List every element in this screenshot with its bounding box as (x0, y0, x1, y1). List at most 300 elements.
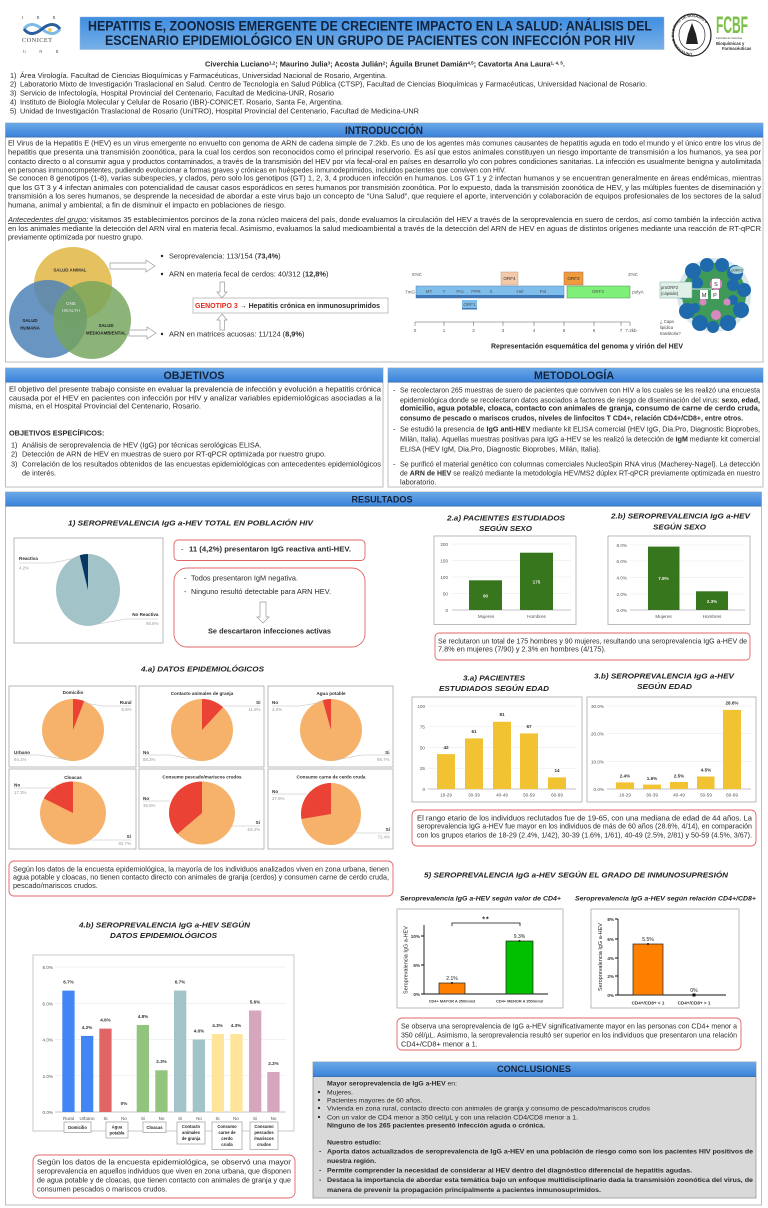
title banner: HEPATITIS E, ZOONOSIS EMERGENTE DE CRECIENTE IMPACTO EN LA SALUD: ANÁLISIS DEL (88, 18, 652, 34)
diagram: HEV genome: ORF4 (503, 276, 516, 281)
text: introducción: humana, animal y ambiental, a fin de disminuir el impacto en poblaciones de riesgo. (8, 200, 286, 210)
logo: IBR CONICET UNR: UNR (23, 49, 72, 54)
venn diagram: one health: SALUD (98, 323, 114, 328)
pie chart: carne de cerdo: 27.6% (272, 796, 285, 801)
text: introducción: que los GT 3 y 4 infectan animales con potencialidad de causar casos esporádicos en seres humanos por transmisión zoonótica. Por lo expuesto, dada la transmisión zoonótica de HEV, y las múltiples fuentes de diseminación y (8, 183, 761, 192)
bar chart: seroprevalencia según datos epidemiológicos: Si (141, 1116, 145, 1121)
bar chart: pacientes según edad: 81 (499, 712, 505, 717)
diagram: HEV genome: 7.2kb (625, 328, 637, 333)
diagram: HEV genome: 5 (563, 328, 566, 333)
text: nuestro estudio: - (319, 1177, 321, 1184)
bar chart: relación CD4+/CD8+: 8% (607, 917, 614, 922)
heading: 2b seroprevalencia según sexo: SEGÚN SEXO (653, 522, 706, 532)
text: mayor seroprevalencia: Pacientes mayores de 60 años. (327, 1097, 422, 1104)
bar chart: seroprevalencia según datos epidemiológicos: 2.0% (43, 1074, 53, 1079)
callout: datos epidemiológicos: pescado/mariscos crudos. (13, 881, 98, 890)
callout: IgG reactiva (174, 540, 365, 560)
pie chart: agua potable: Si (385, 750, 390, 755)
diagram: HEV genome: Pro (456, 289, 464, 294)
bar chart: seroprevalencia según datos epidemiológicos: 5.6% (250, 1000, 260, 1004)
pie chart: carne de cerdo: Consumo carne de cerdo cruda (297, 774, 366, 780)
bar chart: seroprevalencia según sexo: 4.0% (617, 576, 627, 580)
diagram: HEV virion: S (714, 282, 718, 288)
bar chart: seroprevalencia según edad: 50-59 (700, 792, 712, 798)
diagram: HEV genome: ORF2 (592, 289, 605, 294)
affiliations: Laboratorio Mixto de Investigación Traslacional en Salud. Centro de Tecnología en Salud Pública (CTSP), Facultad de Ciencias Bioquímicas y Farmacéuticas, Universidad Nacional de Rosario. (20, 80, 647, 89)
pie chart: domicilio: Urbano (14, 750, 30, 755)
heading: 2a pacientes según sexo (446, 514, 565, 533)
callout: sexo (435, 633, 750, 660)
callout: sexo: 7.8% en mujeres (7/90) y 2.3% en hombres (4/175). (438, 644, 606, 654)
text: nuestro estudio: nuestra región. (327, 1158, 376, 1165)
caption: genome and virion: Representación esquemática del genoma y virión del HEV (491, 342, 683, 350)
bar chart: seroprevalencia según sexo: 8.0% (617, 543, 627, 548)
heading: metodología (388, 368, 763, 382)
bar chart: seroprevalencia según datos epidemiológicos: Consumo (217, 1124, 237, 1129)
results list: animal and environmental: Seroprevalencia: 113/154 (73,4%) (169, 252, 281, 260)
text: mayor seroprevalencia: Mujeres. (327, 1089, 353, 1096)
authors: 3 (328, 60, 331, 66)
diagram: HEV genome: ORF3 (567, 276, 580, 281)
callout: infecciones activas (174, 568, 365, 647)
bar chart: seroprevalencia según datos epidemiológicos: Si (215, 1116, 220, 1121)
bar chart: pacientes según edad: 50-59 (523, 792, 535, 798)
diagram: HEV genome: Y (442, 289, 446, 294)
venn diagram: one health: SALUD ANIMAL (53, 268, 87, 272)
bar chart: pacientes según sexo: 150 (440, 558, 448, 564)
bar chart: seroprevalencia según datos epidemiológicos: pescados (254, 1130, 274, 1135)
bar chart: relación CD4+/CD8+: 6% (607, 937, 614, 942)
text: material genético: de ARN de HEV se realizó mediante la metodología HEV/MS2 dúplex RT-qPCR previamente optimizada en nuestro (400, 468, 760, 478)
bar chart: seroprevalencia según datos epidemiológicos: /mariscos (254, 1136, 274, 1141)
text: objetivos específicos (9, 428, 381, 478)
panel: metodología (388, 368, 763, 487)
authors (205, 60, 565, 68)
authors: 2 (383, 60, 386, 66)
heading: 3a pacientes según edad (439, 674, 550, 693)
callout: infecciones activas: Ninguno resultó detectable para ARN HEV. (191, 587, 331, 596)
arrow: up to genotype (217, 314, 227, 330)
text: introducción: en los animales mediante la detección del ARN viral en materia fecal. Asimismo, evaluamos la salud medioambiental a través de la detección del ARN de HEV en aguas de distintos orígenes mediante una reacción de RT-qPCR (8, 224, 761, 233)
title banner (80, 17, 664, 50)
diagram: HEV virion: P (713, 293, 717, 299)
heading: 3a pacientes según edad: ESTUDIADOS SEGÚN EDAD (439, 684, 550, 693)
bar chart: seroprevalencia según edad: 28.6% (725, 700, 739, 706)
bar chart: relación CD4+/CD8+: Seroprevalencia IgG a-HEV (598, 923, 604, 991)
bar chart: relación CD4+/CD8+: 2% (607, 974, 614, 979)
diagram: HEV virion: M (702, 293, 707, 299)
callout: inmunosupresión (397, 1018, 741, 1050)
text: mayor seroprevalencia: Con un valor de CD4 menor a 350 cel/µL y con una relación CD4/CD8 menor a 1. (327, 1114, 578, 1121)
heading: 4b seroprevalencia epidemiológica: 4.b) SEROPREVALENCIA IgG a-HEV SEGÚN (78, 920, 251, 930)
heading: 4b seroprevalencia epidemiológica (78, 920, 251, 940)
bar chart: seroprevalencia según edad: 20.0% (591, 732, 604, 736)
pie chart: contacto animales (139, 686, 264, 767)
callout: datos epidemiológicos (9, 861, 393, 896)
bar chart: pacientes según edad: 100 (417, 704, 425, 709)
pie chart: pescado: 36.6% (143, 803, 156, 808)
callout: infecciones activas: - (184, 574, 187, 582)
pie chart: domicilio: Domicilio (63, 690, 84, 695)
diagram: HEV genome: 7mG (405, 290, 415, 294)
text: serología: - (393, 424, 396, 434)
text: objetivos específicos: Análisis de seroprevalencia de HEV (IgG) por técnicas serológicas ELISA. (22, 440, 262, 450)
arrow: environment to results (129, 327, 156, 339)
pie chart: contacto animales: No (143, 750, 149, 755)
title banner: ESCENARIO EPIDEMIOLÓGICO EN UN GRUPO DE PACIENTES CON INFECCIÓN POR HIV (105, 33, 635, 48)
diagram: HEV genome: 2 (472, 328, 475, 333)
pie chart: pescado: No (143, 796, 149, 801)
bar chart: seroprevalencia según datos epidemiológicos: 6.0% (43, 1001, 53, 1006)
bar chart: seroprevalencia según sexo: Mujeres (655, 614, 672, 619)
bar chart: seroprevalencia según datos epidemiológicos: cerdo (221, 1136, 233, 1141)
logo: faculty: Bioquímicas y (716, 41, 745, 46)
bar chart: pacientes según edad (412, 697, 582, 802)
bar chart: seroprevalencia según datos epidemiológicos: 4.6% (100, 1018, 111, 1022)
text: objetivos específicos: OBJETIVOS ESPECÍFICOS: (9, 428, 104, 438)
pie chart: domicilio: Rural (120, 700, 132, 705)
bar chart: seroprevalencia según sexo: 0.0% (617, 608, 627, 613)
bar chart: seroprevalencia según datos epidemiológicos: Agua (112, 1124, 123, 1130)
diagram: HEV genome (405, 272, 645, 333)
bar chart: valor de CD4+: 9.3% (514, 934, 526, 940)
heading: 3b seroprevalencia según edad (594, 672, 735, 691)
heading: resultados (6, 492, 762, 506)
text: mayor seroprevalencia: Mayor seroprevalencia de IgG a-HEV en: (327, 1080, 457, 1087)
text: introducción: contacto directo o al consumir agua y productos contaminados, a través de la transmisión del HEV por vía fecal-oral en países en desarrollo y/o con pobres condiciones sanitarias. La infección es usualmente benigna y autolimitada (8, 157, 762, 166)
text: material genético: laboratorio. (400, 478, 437, 486)
bar chart: valor de CD4+: Seroprevalencia IgG a-HEV (404, 926, 410, 994)
text: objetivos específicos: 3) (11, 460, 18, 468)
bar chart: pacientes según edad: 0 (422, 787, 425, 792)
bar chart: pacientes según edad: 50 (420, 746, 425, 750)
diagram: HEV virion: pORF3 (732, 268, 743, 272)
pie chart: cloacas (9, 769, 136, 849)
venn diagram: one health: MEDIOAMBIENTAL (86, 330, 126, 336)
text: nuestro estudio: - (319, 1148, 321, 1155)
heading: 5 inmunosupresión: 5) SEROPREVALENCIA IgG a-HEV SEGÚN EL GRADO DE INMUNOSUPRESIÓN (424, 870, 729, 880)
text: muestras: Se recolectaron 265 muestras de suero de pacientes que conviven con HIV a los cuales se les realizó una encuesta (400, 386, 761, 394)
text: nuestro estudio (319, 1139, 753, 1194)
pie chart: pescado: Si (256, 820, 260, 825)
affiliations: 2) (10, 80, 16, 89)
text: serología (393, 424, 760, 454)
text: nuestro estudio: - (319, 1167, 321, 1174)
bar chart: pacientes según edad: 42 (443, 745, 449, 750)
heading: conclusiones (313, 1062, 756, 1077)
heading: metodología: METODOLOGÍA (534, 369, 614, 382)
callout: sexo: Se reclutaron un total de 175 hombres y 90 mujeres, resultando una seroprevalencia IgG a-HEV de (438, 636, 747, 646)
bar chart: valor de CD4+: ** (482, 916, 490, 924)
bar chart: pacientes según sexo: 90 (483, 594, 488, 598)
pie chart: agua potable: 4.3% (272, 707, 282, 712)
diagram: HEV genome: 4 (533, 328, 536, 333)
text: objetivo general (9, 384, 382, 410)
text: introducción: El Virus de la Hepatitis E (HEV) es un virus emergente no envuelto con genoma de ARN de cadena simple de 7.2kb. Es uno de los agentes más comunes causantes de hepatitis aguda en todo el mundo y el único entre los virus de (8, 138, 761, 148)
authors: ; Águila Brunet Damián (385, 60, 468, 68)
results list: animal and environmental: ARN en materia fecal de cerdos: 40/312 (12,8%) (169, 270, 328, 278)
bar chart: seroprevalencia según datos epidemiológicos: Consumo (254, 1124, 274, 1129)
authors: ; Maurino Julia (275, 60, 328, 68)
bar chart: seroprevalencia según sexo: 6.0% (617, 559, 627, 564)
heading: conclusiones: CONCLUSIONES (497, 1064, 571, 1074)
bar chart: seroprevalencia según datos epidemiológicos: 4.3% (231, 1023, 241, 1028)
authors: Civerchia Luciano (205, 60, 270, 68)
logo: faculty: Facultad de Ciencias (716, 36, 743, 40)
logo: IBR CONICET UNR: CONICET (22, 37, 52, 44)
pie chart: agua potable (268, 686, 393, 767)
bar chart: valor de CD4+: 2.1% (446, 976, 458, 982)
pie chart: pescado (139, 769, 264, 849)
logo: IBR CONICET UNR (22, 15, 72, 54)
text: nuestro estudio: Destaca la importancia de abordar esta temática bajo un enfoque multidisciplinario dada la transmisión zoonótica del virus, de (327, 1177, 753, 1184)
affiliations: Servicio de Infectología, Hospital Provincial del Centenario, Facultad de Medicina-UNR, Rosario (20, 89, 334, 98)
pie chart: seroprevalencia total: 95.8% (146, 621, 159, 626)
bar chart: pacientes según sexo: Hombres (527, 614, 547, 619)
text: objetivos específicos: 1) (11, 440, 18, 450)
text: muestras: - (393, 386, 396, 394)
pie chart: carne de cerdo: Si (386, 827, 390, 832)
heading: 2a pacientes según sexo: SEGÚN SEXO (479, 524, 532, 533)
diagram: HEV virion: proORF2 (661, 285, 679, 290)
text: material genético (393, 460, 760, 486)
text: objetivos específicos: Correlación de los resultados obtenidos de las encuestas epidemiológicas con antecedentes epidemiológicos (22, 460, 381, 468)
text: muestras: epidemiológica donde se recolectaron datos asociados a factores de riesgo de diseminación del virus: sexo, edad, (400, 396, 760, 404)
callout: datos epidemiológicos: agua potable y cloacas, no tienen contacto directo con animales de granja (cerdos) y consumen carne de cerdo cruda, (13, 872, 389, 882)
bar chart: seroprevalencia según datos epidemiológicos: 6.7% (175, 980, 185, 984)
pie chart: agua potable: Agua potable (316, 691, 346, 696)
panel: conclusiones (313, 1062, 756, 1198)
bar chart: seroprevalencia según edad: 40-49 (673, 792, 685, 798)
text: nuestro estudio: Permite comprender la necesidad de considerar al HEV dentro del diagnóstico diferencial de hepatitis agudas. (327, 1167, 692, 1174)
bar chart: seroprevalencia según edad: 1.6% (647, 776, 657, 781)
callout: IgG reactiva: - (181, 544, 184, 554)
callout: seroprevalencia epidemiológica: de agua potable y de cloacas, que tienen contacto con animales de granja y que (37, 1176, 291, 1184)
callout: infecciones activas: Todos presentaron IgM negativa. (191, 574, 298, 582)
pie chart: cloacas: No (14, 782, 20, 788)
text: mayor seroprevalencia: Ninguno de los 265 pacientes presentó infección aguda o crónica. (327, 1122, 545, 1129)
bar chart: seroprevalencia según datos epidemiológicos: 2.3% (156, 1059, 167, 1064)
bar chart: seroprevalencia según datos epidemiológicos: Si (253, 1116, 257, 1121)
bar chart: seroprevalencia según datos epidemiológicos: crudos (257, 1142, 272, 1147)
pie chart: agua potable: No (272, 700, 278, 705)
affiliations: 3) (10, 89, 16, 98)
pie chart: pescado: 63.4% (248, 827, 260, 832)
diagram: HEV virion: (cápside) (661, 291, 679, 296)
bar chart: seroprevalencia según datos epidemiológicos: 8.0% (43, 965, 53, 970)
bar chart: pacientes según sexo: 50 (443, 592, 448, 596)
text: objetivos específicos: Detección de ARN de HEV en muestras de suero por RT-qPCR optimizada por nuestro grupo. (22, 450, 326, 458)
affiliations: Unidad de Investigación Traslacional de Rosario (UniTRO), Hospital Provincial del Centenario, Facultad de Medicina-UNR (20, 106, 419, 115)
pie chart: carne de cerdo (268, 769, 393, 849)
bar chart: seroprevalencia según datos epidemiológicos: 6.7% (63, 980, 74, 984)
callout: seroprevalencia epidemiológica: consumen pescados o mariscos crudos. (37, 1184, 167, 1194)
diagram: HEV genome: PPR (471, 289, 481, 294)
bar chart: seroprevalencia según datos epidemiológicos (33, 955, 294, 1150)
panel: resultados (6, 492, 762, 1205)
text: introducción: previamente optimizada por nuestro grupo. (8, 232, 143, 242)
text: mayor seroprevalencia: Vivienda en zona rural, contacto directo con animales de granja y consumo de pescado/mariscos crudos (327, 1105, 651, 1112)
bar chart: relación CD4+/CD8+: 5.5% (642, 937, 654, 943)
pie chart: seroprevalencia total (14, 538, 163, 643)
bar chart: pacientes según edad: 75 (420, 724, 425, 730)
text: objetivos específicos: de interés. (22, 468, 56, 478)
bar chart: valor de CD4+: CD4+ MENOR A 350/mm3 (496, 998, 544, 1004)
callout: seroprevalencia epidemiológica: Según los datos de la encuesta epidemiológica, se observó una mayor (37, 1158, 292, 1166)
diagram: HEV genome: X (489, 289, 493, 294)
bar chart: seroprevalencia según datos epidemiológicos: Contacto (182, 1124, 201, 1129)
bar chart: relación CD4+/CD8+: CD4+/CD8+ < 1 (632, 1000, 665, 1006)
bar chart: relación CD4+/CD8+: 0% (690, 988, 698, 994)
heading: 4a datos epidemiológicos: 4.a) DATOS EPIDEMIOLÓGICOS (140, 664, 264, 674)
callout: genotipo 3: GENOTIPO 3 → Hepatitis crónica en inmunosuprimidos (195, 301, 380, 310)
pie chart: carne de cerdo: No (272, 789, 278, 794)
diagram: HEV genome: 3 (502, 328, 505, 333)
panel: objetivos (6, 368, 383, 487)
bar chart: pacientes según edad: 67 (526, 724, 532, 729)
arrow: animal to results (110, 260, 155, 272)
callout: seroprevalencia epidemiológica: seroprevalencia en aquellos individuos que viven en zona urbana, que disponen (37, 1166, 291, 1176)
affiliations: Instituto de Biología Molecular y Celular de Rosario (IBR)-CONICET. Rosario, Santa Fe, Argentina. (20, 97, 343, 106)
bar chart: pacientes según edad: 30-39 (468, 792, 480, 798)
pie chart: seroprevalencia total: Reactiva (19, 556, 38, 561)
heading: seroprevalencia total: 1) SEROPREVALENCIA IgG a-HEV TOTAL EN POBLACIÓN HIV (68, 518, 314, 528)
text: muestras (393, 386, 761, 422)
bar chart: seroprevalencia según datos epidemiológicos: Si (103, 1116, 108, 1121)
callout: infecciones activas: - (184, 587, 187, 596)
venn diagram: one health: HEALTH (62, 308, 80, 313)
bar chart: seroprevalencia según datos epidemiológicos: Rural (63, 1116, 74, 1121)
bar chart: seroprevalencia según datos epidemiológicos: Domicilio (68, 1125, 87, 1130)
pie chart: contacto animales: 88.2% (143, 757, 156, 762)
heading: introducción (6, 123, 763, 138)
bar chart: pacientes según sexo: Mujeres (478, 614, 495, 619)
bar chart: seroprevalencia según datos epidemiológicos: animales (182, 1130, 201, 1135)
bar chart: seroprevalencia según edad: 0.0% (594, 787, 604, 792)
results list: animal and environmental: ARN en matrices acuosas: 11/124 (8,9%) (169, 330, 304, 338)
pie chart: cloacas: Si (127, 834, 131, 839)
bar chart: relación CD4+/CD8+: CD4+/CD8+ > 1 (678, 1000, 711, 1006)
subheading: relación CD4+/CD8+: Seroprevalencia IgG a-HEV según relación CD4+/CD8+ (575, 896, 756, 902)
pie chart: agua potable: 95.7% (377, 757, 390, 762)
text: material genético: Se purificó el material genético con columnas comerciales NucleoSpin RNA virus (Macherey-Nagel). La detección (400, 460, 760, 468)
bar chart: seroprevalencia según edad: 10.0% (591, 760, 604, 764)
bar chart: pacientes según sexo (434, 536, 576, 624)
text: objetivo general: El objetivo del presente trabajo consiste en evaluar la prevalencia de infección y evolución a hepatitis crónica (9, 384, 382, 394)
bar chart: seroprevalencia según edad: 4.5% (701, 768, 711, 772)
text: muestras: consumo de pescado o mariscos crudos, niveles de linfocitos T CD4+, relación CD4+/CD8+, entre otros. (400, 414, 743, 422)
text: nuestro estudio: manera de prevenir la propagación principalmente a pacientes inmunosuprimidos. (327, 1187, 601, 1194)
text: introducción: en personas inmunocompetentes, pudiendo evolucionar a formas graves y crónicas en huéspedes inmunodeprimidos, incluidos pacientes que conviven con HIV. (8, 166, 506, 174)
bar chart: relación CD4+/CD8+: 4% (607, 956, 614, 961)
bar chart: seroprevalencia según datos epidemiológicos: Si (178, 1116, 182, 1121)
venn diagram: one health (9, 247, 131, 359)
callout: inmunosupresión: Se observa una seroprevalencia de IgG a-HEV significativamente mayor en las personas con CD4+ menor a (401, 1022, 738, 1030)
bar chart: seroprevalencia según edad: 18-29 (619, 792, 631, 798)
authors: ; Cavatorta Ana Laura (474, 60, 551, 68)
text: muestras: domicilio, agua potable, cloaca, contacto con animales de granja, consumo de carne de cerdo cruda, (400, 404, 760, 412)
affiliations: 5) (10, 106, 16, 115)
pie chart: pescado: Consumo pescado/mariscos crudos (162, 774, 242, 780)
diagram: HEV genome: MT (426, 289, 433, 294)
bar chart: seroprevalencia según datos epidemiológicos: potable (110, 1130, 125, 1136)
logo: faculty (716, 12, 752, 51)
bar chart: seroprevalencia según datos epidemiológicos: 4.8% (138, 1014, 148, 1019)
heading: 3b seroprevalencia según edad: SEGÚN EDAD (637, 682, 693, 691)
affiliations: 4) (10, 97, 16, 106)
heading: resultados: RESULTADOS (352, 494, 412, 504)
bar chart: valor de CD4+: 0% (413, 992, 420, 997)
bar chart: seroprevalencia según datos epidemiológicos: 0.0% (43, 1110, 53, 1115)
bar chart: pacientes según sexo: 175 (533, 580, 541, 584)
text: objetivo general: misma, en el Hospital Provincial del Centenario, Rosario. (9, 402, 201, 410)
bar chart: seroprevalencia según edad: 60-69 (726, 792, 738, 798)
bar chart: seroprevalencia según datos epidemiológicos: No (233, 1116, 239, 1121)
bar chart: seroprevalencia según datos epidemiológicos: No (271, 1116, 277, 1121)
bar chart: seroprevalencia según sexo: 2.0% (617, 592, 627, 597)
bar chart: seroprevalencia según edad: 30.0% (591, 704, 604, 709)
authors: 1, 4, 5 (551, 60, 563, 66)
pie chart: carne de cerdo: 72.4% (378, 834, 390, 840)
callout: seroprevalencia epidemiológica (33, 1155, 295, 1198)
bar chart: seroprevalencia según datos epidemiológicos: Urbano (79, 1116, 95, 1121)
bar chart: seroprevalencia según sexo (608, 536, 750, 624)
bar chart: seroprevalencia según datos epidemiológicos: 4.2% (82, 1025, 92, 1030)
bar chart: valor de CD4+: 10% (411, 934, 420, 939)
pie chart: contacto animales: 11.8% (248, 707, 261, 712)
text: nuestro estudio: Aporta datos actualizados de seroprevalencia de IgG a-HEV en una población de riesgo como son los pacientes HIV positivos de (327, 1148, 753, 1155)
pie chart: domicilio: 5.9% (121, 707, 132, 712)
diagram: HEV virion: lipídica (660, 325, 674, 330)
authors: 1,2 (269, 60, 276, 66)
bar chart: seroprevalencia según datos epidemiológicos: No (121, 1116, 127, 1121)
arrow: down to genotype (217, 282, 227, 298)
diagram: HEV genome: 1 (443, 328, 446, 333)
bar chart: pacientes según edad: 14 (554, 768, 560, 773)
bar chart: pacientes según sexo: 0 (445, 608, 448, 613)
heading: 3a pacientes según edad: 3.a) PACIENTES (463, 674, 525, 682)
text: introducción: Se conocen 8 genotipos (1-8), varias subespecies, y clados, pero solo los genotipos (GT) 1, 2, 3, 4 producen infección en humanos. Los GT 1 y 2 infectan humanos y se encuentran generalmente en áreas endémicas, mientras (8, 174, 761, 182)
venn diagram: one health: ONE (66, 301, 76, 306)
diagram: HEV virion (660, 258, 751, 336)
subheading: valor de CD4+: Seroprevalencia IgG a-HEV según valor de CD4+ (400, 896, 561, 902)
bar chart: pacientes según edad: 61 (471, 729, 477, 734)
text: introducción: Antecedentes del grupo: visitamos 35 establecimientos porcinos de la zona núcleo maicera del país, donde evaluamos la circulación del HEV a través de la seroprevalencia en suero de cerdos, así como también la infección activa (7, 215, 762, 224)
pie chart: contacto animales: Si (256, 700, 260, 705)
heading: 2b seroprevalencia según sexo (610, 512, 751, 532)
bar chart: pacientes según sexo: 200 (440, 542, 448, 547)
bar chart: relación CD4+/CD8+: 0% (607, 993, 614, 998)
callout: edad: con los grupos etarios de 18-29 (2.4%, 1/42), 30-39 (1.6%, 1/61), 40-49 (2.5%, 2/81) y 50-59 (4.5%, 3/67). (417, 830, 752, 840)
bar chart: valor de CD4+: 5% (413, 963, 420, 968)
callout: edad (412, 810, 756, 846)
diagram: HEV genome: 7 (620, 328, 623, 333)
bar chart: seroprevalencia según datos epidemiológicos: carne de (218, 1130, 236, 1135)
diagram: HEV genome: 6 (593, 328, 596, 333)
bar chart: relación CD4+/CD8+ (591, 909, 739, 1008)
bar chart: seroprevalencia según sexo: Hombres (703, 614, 722, 619)
callout: inmunosupresión: CD4+/CD8+ menor a 1. (401, 1040, 478, 1048)
bar chart: valor de CD4+: CD4+ MAYOR A 350/mm3 (429, 998, 476, 1004)
bar chart: pacientes según edad: 60-69 (551, 792, 563, 798)
callout: genotipo 3 (193, 298, 388, 313)
bar chart: seroprevalencia según datos epidemiológicos: de granja (182, 1136, 201, 1141)
diagram: HEV genome: 0 (414, 328, 417, 333)
bar chart: seroprevalencia según sexo: 7.8% (658, 576, 669, 581)
authors: ; Acosta Julián (330, 60, 383, 68)
bar chart: seroprevalencia según datos epidemiológicos: 2.2% (268, 1061, 279, 1066)
bar chart: seroprevalencia según edad: 2.5% (674, 774, 684, 778)
